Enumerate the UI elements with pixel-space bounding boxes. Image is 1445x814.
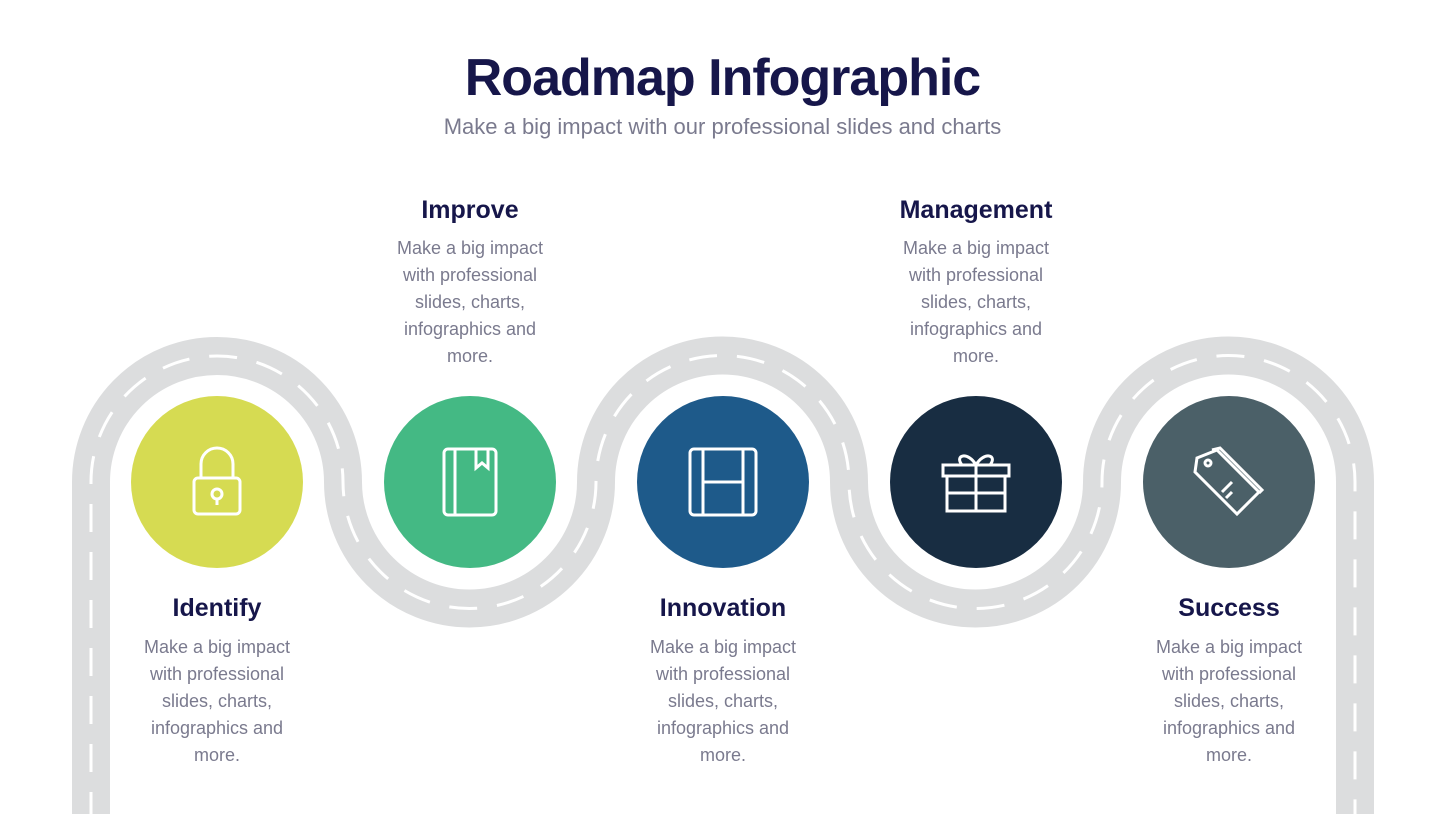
step 1: Identify xyxy=(144,594,290,765)
step 5: Success xyxy=(1156,594,1302,765)
text: Make a big impact with professional slides, charts, infographics and more. xyxy=(650,637,796,765)
text: Innovation xyxy=(660,594,786,622)
step 2: Improve xyxy=(397,196,543,366)
text: Make a big impact with professional slides, charts, infographics and more. xyxy=(1156,637,1302,765)
text: Make a big impact with professional slides, charts, infographics and more. xyxy=(903,238,1049,366)
text: Improve xyxy=(421,196,519,224)
text: Management xyxy=(900,196,1052,224)
road xyxy=(91,356,1355,814)
circle 2: book xyxy=(384,396,556,568)
text: Make a big impact with professional slides, charts, infographics and more. xyxy=(397,238,543,366)
subtitle: Make a big impact with our professional slides and charts xyxy=(444,114,1001,139)
title: Roadmap Infographic xyxy=(465,49,980,107)
circle 4: gift xyxy=(890,396,1062,568)
text: Make a big impact with professional slides, charts, infographics and more. xyxy=(144,637,290,765)
circle 3: film xyxy=(637,396,809,568)
step 3: Innovation xyxy=(650,594,796,765)
circle 1: lock xyxy=(131,396,303,568)
step 4: Management xyxy=(900,196,1052,366)
circle 5: tags xyxy=(1143,396,1315,568)
text: Success xyxy=(1178,594,1280,622)
text: Identify xyxy=(173,594,261,622)
